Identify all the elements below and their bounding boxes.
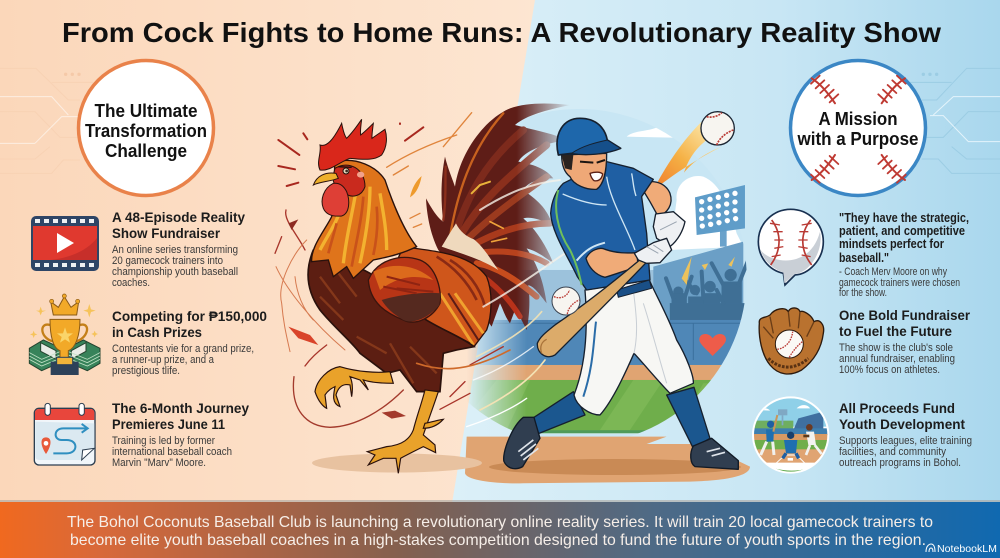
text: competing for cash prizes [112, 308, 267, 377]
heading circle: the ultimate transformation challenge: Transformation [85, 121, 207, 141]
text: six month journey: The 6-Month Journey [112, 400, 249, 416]
batter pants [574, 280, 693, 415]
batter cap [557, 118, 621, 155]
heading circle: mission with a purpose: A Mission [818, 109, 898, 129]
small baseball [552, 287, 580, 315]
ground patch under batter [465, 437, 750, 483]
ground shadow under rooster [312, 454, 482, 472]
batter socks [530, 392, 585, 435]
rooster head [333, 165, 365, 196]
circuit lines left [0, 68, 93, 173]
text: coach quote: for the show. [839, 287, 887, 299]
rooster neck hackle [312, 160, 417, 278]
batter shoes [504, 417, 540, 469]
text: six month journey: Marvin "Marv" Moore. [112, 457, 206, 469]
text: competing for cash prizes: Contestants vie for a grand prize, [112, 343, 254, 355]
text: one bold fundraiser: 100% focus on athletes. [839, 364, 940, 376]
text: one bold fundraiser: to Fuel the Future [839, 323, 952, 339]
text: coach quote: "They have the strategic, [839, 211, 969, 225]
icon: trophy with crown and cash [29, 294, 100, 375]
text: coach quote: patient, and competitive [839, 224, 965, 238]
scoreboard [695, 185, 745, 235]
icon: baseball glove [759, 308, 824, 374]
rooster wattle [322, 183, 349, 216]
text: 48-episode reality show: 20 gamecock trainers into [112, 255, 223, 267]
text: all proceeds: All Proceeds Fund [839, 400, 955, 416]
text: competing for cash prizes: in Cash Prizes [112, 324, 202, 340]
text: 48-episode reality show: championship youth baseball [112, 266, 238, 278]
text: 48-episode reality show: A 48-Episode Reality [112, 209, 245, 225]
text: six month journey: Training is led by former [112, 435, 215, 447]
text: coach quote: baseball." [839, 251, 889, 265]
text: one bold fundraiser: annual fundraiser, enabling [839, 353, 955, 365]
text: six month journey [112, 400, 249, 469]
text: coach quote: mindsets perfect for [839, 237, 944, 251]
icon: calendar with route [34, 403, 95, 465]
text: coach quote: - Coach Merv Moore on why [839, 266, 948, 278]
text: 48-episode reality show: Show Fundraiser [112, 225, 221, 241]
batter belt [617, 280, 652, 297]
batter bat [537, 255, 649, 357]
rooster comb [319, 119, 386, 170]
text: competing for cash prizes: a runner-up prize, and a [112, 354, 214, 366]
text: one bold fundraiser [839, 307, 971, 376]
text: all proceeds: facilities, and community [839, 446, 947, 458]
icon: baseball speech bubble [758, 209, 823, 285]
text: 48-episode reality show [112, 209, 245, 289]
heading circle: mission with a purpose: with a Purpose [797, 129, 918, 149]
flying baseball [701, 112, 734, 145]
text: coach quote: gamecock trainers were chosen [839, 277, 960, 289]
text: all proceeds: outreach programs in Bohol. [839, 457, 961, 469]
icon: heart on wall [699, 334, 726, 356]
rooster wing [368, 257, 440, 322]
text: coach quote [839, 211, 969, 299]
batter face [562, 153, 607, 189]
bottom banner [0, 500, 1000, 558]
batter forearm [586, 248, 638, 277]
rooster saddle plume [442, 223, 498, 270]
bottom banner: become elite youth baseball coaches in a high-stakes competition designed to fund the future of youth sports in the region. [70, 532, 926, 549]
speed streaks between rooster and batter [467, 180, 565, 427]
text: 48-episode reality show: An online series transforming [112, 244, 238, 256]
rooster lower hackle [390, 247, 491, 347]
rooster [275, 104, 570, 473]
rooster motion marks [275, 113, 510, 427]
background: blue right half [443, 0, 1000, 558]
circuit lines right [910, 68, 1000, 173]
icon: video film strip [31, 216, 99, 271]
ground shadow under batter [489, 459, 741, 475]
text: competing for cash prizes: Competing for ₱150,000 [112, 308, 267, 324]
rooster body [308, 247, 474, 392]
rooster legs [315, 367, 443, 473]
text: 48-episode reality show: coaches. [112, 277, 150, 289]
text: one bold fundraiser: The show is the club's sole [839, 342, 953, 354]
bottom banner: The Bohol Coconuts Baseball Club is launching a revolutionary online reality series. It will train 20 local gamecock trainers to [67, 514, 933, 531]
heading circle: the ultimate transformation challenge: Challenge [105, 141, 187, 161]
batter [504, 112, 738, 469]
stadium scene behind batter [470, 109, 746, 436]
text: all proceeds: Supports leagues, elite training [839, 435, 972, 447]
text: all proceeds: Youth Development [839, 416, 965, 432]
watermark: NotebookLM: NotebookLM [937, 544, 997, 555]
text: all proceeds [839, 400, 972, 469]
batter jersey [551, 162, 653, 290]
text: competing for cash prizes: prestigious tlife. [112, 365, 180, 377]
rooster tail feathers [426, 104, 570, 330]
batter flame trail [650, 122, 722, 197]
text: six month journey: international baseball coach [112, 446, 232, 458]
heading circle: mission with a purpose [790, 60, 926, 196]
rooster beak [313, 173, 338, 185]
title: From Cock Fights to Home Runs: A Revolutionary Reality Show [62, 17, 941, 48]
text: one bold fundraiser: One Bold Fundraiser [839, 307, 971, 323]
heading circle: the ultimate transformation challenge [78, 60, 214, 196]
heading circle: the ultimate transformation challenge: The Ultimate [94, 101, 198, 121]
text: six month journey: Premieres June 11 [112, 416, 225, 432]
batter gloves [653, 212, 685, 247]
icon: youth baseball scene [750, 396, 833, 477]
batter back arm [640, 182, 671, 217]
